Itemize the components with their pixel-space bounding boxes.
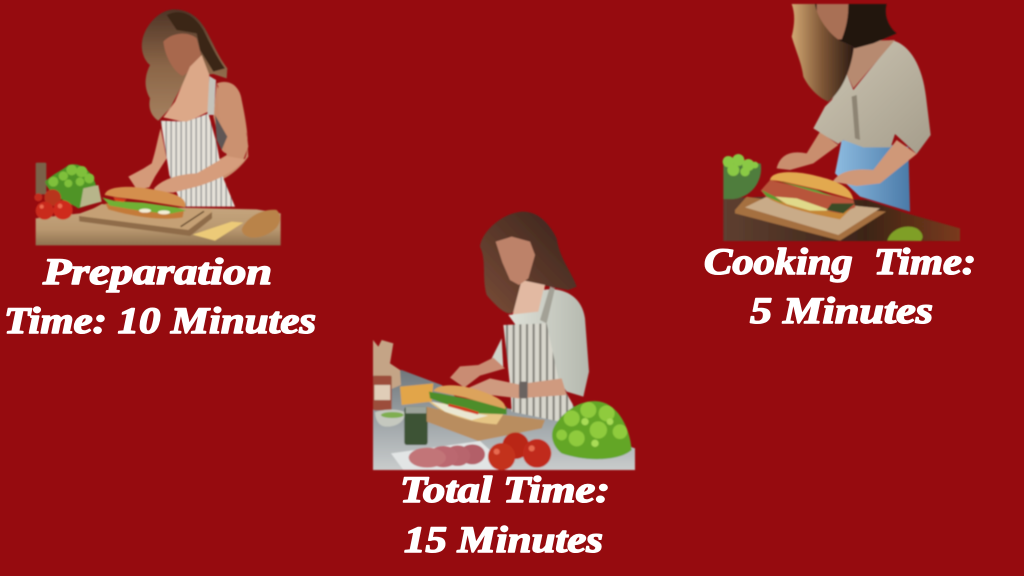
illustration: woman with sandwich on wooden board bbox=[723, 4, 960, 241]
near arm bbox=[128, 128, 167, 189]
cheese bbox=[400, 383, 433, 405]
arm bbox=[450, 358, 505, 388]
blouse far sleeve bbox=[492, 338, 503, 368]
apron strap bbox=[540, 287, 555, 323]
counter bbox=[36, 206, 281, 245]
heading line: Time 10 Minutes: Time: 10 Minutes bbox=[4, 301, 316, 342]
heading line: 5 Minutes: 5 Minutes bbox=[750, 291, 933, 332]
dark crown of hair bbox=[167, 12, 225, 72]
table bbox=[723, 197, 960, 241]
blouse bbox=[813, 41, 931, 154]
apron bbox=[161, 113, 235, 207]
filling bbox=[761, 180, 855, 213]
jeans bbox=[835, 140, 910, 212]
bread bottom bbox=[429, 402, 505, 424]
neck and chest bbox=[163, 55, 209, 123]
sandwich filling bbox=[102, 197, 186, 214]
neck bbox=[842, 40, 895, 88]
hair bbox=[480, 212, 577, 314]
bowl of lettuce bbox=[723, 163, 761, 199]
bread top bbox=[770, 172, 853, 199]
wavy hair bbox=[792, 4, 854, 102]
apron strap bbox=[207, 76, 216, 115]
illustration: woman at kitchen counter with ingredients bbox=[373, 212, 635, 470]
neck bbox=[512, 280, 545, 318]
bottle bbox=[36, 163, 46, 194]
bread bottom bbox=[768, 198, 853, 219]
heading line: 15 Minutes: 15 Minutes bbox=[404, 520, 603, 561]
filling lettuce and cheese bbox=[762, 180, 855, 213]
bread roll bbox=[242, 210, 280, 238]
sandwich filling bbox=[429, 392, 507, 420]
pepper mill and jar bbox=[373, 340, 401, 392]
bread bottom bbox=[105, 203, 184, 219]
parchment paper bbox=[745, 197, 880, 235]
paper bbox=[391, 441, 512, 470]
pepper bbox=[887, 227, 923, 241]
heading line: Total Time: Total Time: bbox=[400, 470, 610, 511]
tomatoes bbox=[34, 189, 73, 220]
far arm bbox=[777, 132, 838, 170]
board edge bbox=[79, 212, 212, 236]
dark hair bbox=[800, 4, 897, 48]
face bbox=[817, 4, 848, 39]
heading line: Preparation: Preparation bbox=[42, 252, 272, 293]
jar left bbox=[373, 376, 392, 410]
counter bbox=[373, 370, 635, 470]
hair back bbox=[142, 9, 227, 121]
cutting board bbox=[735, 197, 886, 241]
panel: total time bbox=[373, 212, 635, 561]
tomatoes bbox=[488, 432, 551, 470]
bowl contents bbox=[381, 412, 404, 418]
cutting board bbox=[427, 407, 545, 441]
panel: cooking time bbox=[704, 4, 976, 332]
illustration: woman preparing a sandwich bbox=[34, 9, 281, 245]
face bbox=[163, 34, 201, 76]
apron bbox=[503, 323, 575, 422]
top shadow of blouse bbox=[852, 95, 860, 140]
watch bbox=[519, 382, 528, 398]
blouse bbox=[508, 289, 589, 397]
dress dark bbox=[215, 115, 227, 150]
panel: preparation time bbox=[4, 9, 316, 342]
bread top bbox=[433, 385, 506, 409]
face bbox=[496, 237, 535, 285]
near arm bbox=[833, 140, 917, 186]
lettuce bbox=[552, 401, 632, 459]
small bowl bbox=[375, 410, 405, 427]
cutting board bbox=[78, 204, 212, 233]
lettuce bbox=[45, 164, 102, 208]
bread top bbox=[105, 187, 186, 207]
lettuce bbox=[723, 154, 758, 176]
board groove bbox=[181, 211, 204, 227]
arm upper fill bbox=[195, 83, 248, 180]
heading line: Cooking Time: Cooking Time: bbox=[704, 242, 976, 283]
near arm with watch bbox=[469, 378, 567, 398]
far shoulder and arm bbox=[180, 82, 248, 190]
near arm over apron bbox=[154, 156, 245, 193]
meat slices bbox=[409, 444, 485, 468]
herb jar bbox=[404, 407, 428, 445]
cheese bbox=[193, 222, 243, 241]
